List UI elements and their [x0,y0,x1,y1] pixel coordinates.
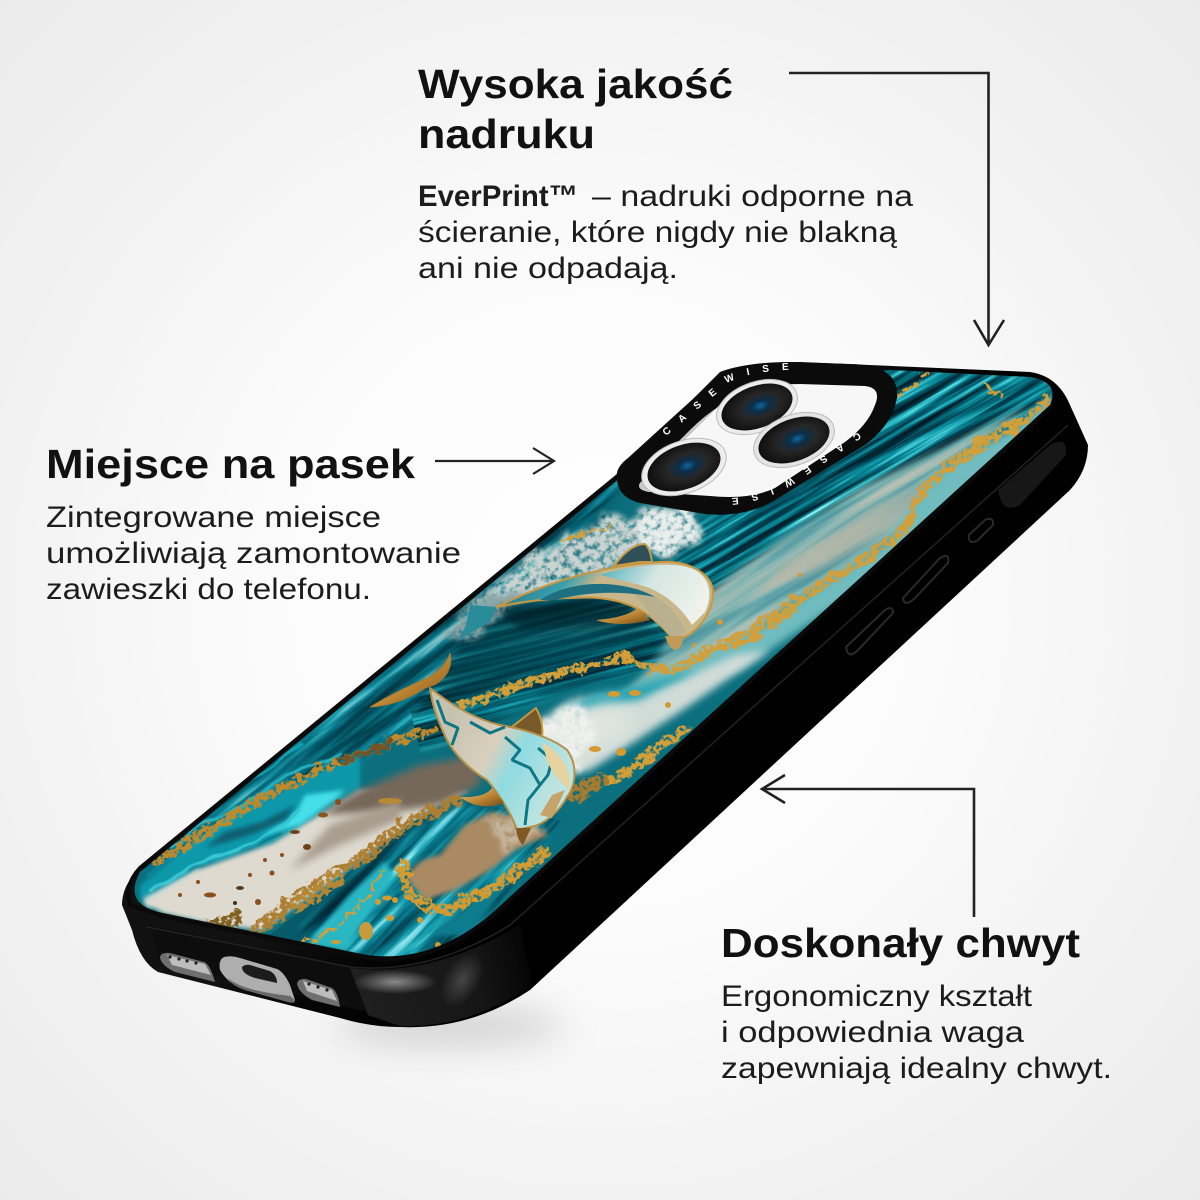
gold flecks [178,573,802,948]
body: grip: zapewniają idealny chwyt. [721,1052,1112,1085]
camera island [616,362,898,515]
speaker grille right [297,979,340,1007]
brown band end [320,755,480,815]
body: print quality: ani nie odpadają. [418,252,678,285]
body: strap slot: umożliwiają zamontowanie [46,537,461,570]
clear camera window [639,384,877,497]
case rim [128,405,1053,959]
body: strap slot: zawieszki do telefonu. [46,573,371,606]
arrow: grip [762,775,974,917]
text block: print quality [418,61,913,285]
ring lettering lower: CASEWISE [732,433,860,505]
streak layer: upper right [659,370,1052,590]
tail upper [458,605,497,640]
bright teal stripe [305,862,395,950]
camera ring [617,362,897,515]
heading: print quality: nadruku [418,111,595,157]
body: strap slot [46,501,461,606]
dorsal fin upper [614,544,652,566]
body: print quality: – nadruki odporne na [592,180,913,213]
heading: print quality [418,61,733,157]
heading: grip: Doskonały chwyt [721,920,1080,966]
lens left [634,428,734,506]
gold stipple halo [404,850,545,910]
gold veins [157,375,1047,945]
body: grip: Ergonomiczny kształt [721,980,1033,1013]
charging port [220,956,295,1003]
corner highlight right [431,945,493,1015]
phone shadow [335,1008,565,1044]
bottom face gloss [150,925,368,1012]
phone case with marble print [122,362,1088,1028]
sand patch [408,812,548,900]
window shading [639,384,800,492]
lens top [709,369,805,445]
grey agate core [768,474,940,586]
arrow: strap slot [435,448,554,474]
pale teal beyond gold [620,395,1060,700]
dolphin lower [370,653,575,845]
body: print quality [418,180,913,285]
heading: print quality: Wysoka jakość [418,61,733,107]
agate band [624,404,1028,690]
pectoral fin upper [596,608,650,624]
tail flukes [370,653,451,707]
pectoral fin lower [460,788,504,806]
body: strap slot: Zintegrowane miejsce [46,501,381,534]
ring lettering: CASEWISE [663,363,788,434]
shadow under upper dolphin [497,600,650,630]
body lower [430,688,575,830]
snout upper [665,636,684,650]
head upper [600,565,709,625]
heading: strap slot: Miejsce na pasek [46,441,415,487]
body: grip [721,980,1112,1085]
streak layer: mid dark [410,598,668,752]
corner highlight [353,970,437,994]
snout lower [516,828,531,845]
left band shade [219,487,614,818]
pale lower right band [535,650,770,775]
body: print quality: ścieranie, które nigdy nie blakną [418,216,897,249]
lower teal swirl [270,800,560,955]
case body [122,362,1088,1027]
cyan highlight [262,790,345,835]
dark fold [205,805,295,848]
speaker grille left [160,953,215,982]
corner panel [350,925,532,1026]
glass ridge [147,425,1068,968]
bright teal left [140,755,360,900]
white beige band [143,790,470,930]
teal streaks [150,745,340,893]
body upper [497,562,713,640]
body: grip: i odpowiednia waga [721,1016,1024,1049]
teal veins lower [437,700,552,825]
body: print quality: EverPrint™ [418,180,578,213]
dolphin upper [458,544,713,650]
pale foot of left band [143,868,200,908]
white foam [470,505,705,612]
arrow: print quality [789,73,1004,345]
lens right [746,402,842,478]
dark area under upper dolphin [430,605,670,700]
dorsal fin lower [508,708,542,737]
streak layer: left band [142,480,620,878]
text block: strap slot [46,441,461,606]
marble print [134,370,1052,956]
text block: grip [721,920,1112,1085]
side buttons [846,519,993,654]
side switch recess [998,442,1066,508]
